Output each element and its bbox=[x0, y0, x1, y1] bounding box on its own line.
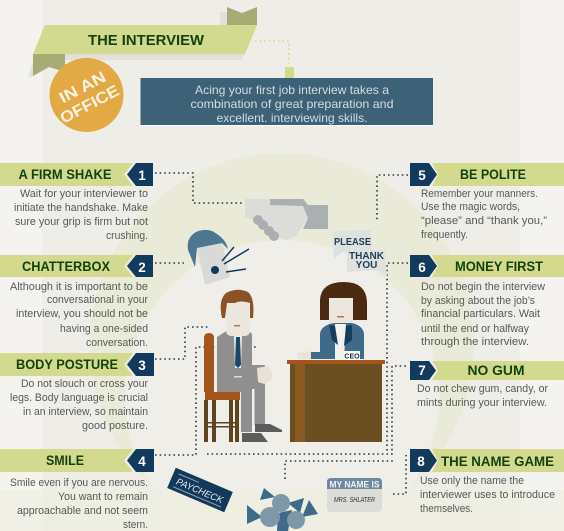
icon: paycheck: PAYCHECK bbox=[174, 477, 225, 506]
panel: 1 a firm shake bbox=[0, 163, 153, 242]
panel: 2 chatterbox: conversational in your bbox=[47, 294, 148, 306]
panel: 6 money first bbox=[410, 255, 564, 348]
panel: 4 smile: approachable and not seem bbox=[17, 505, 148, 517]
title ribbon bbox=[28, 7, 257, 78]
icon: paycheck bbox=[167, 468, 233, 512]
panel: 1 a firm shake: crushing. bbox=[106, 230, 148, 242]
intro connector bbox=[255, 41, 294, 79]
panel: 4 smile: You want to remain bbox=[58, 491, 148, 503]
panel: 6 money first: until the end or halfway bbox=[421, 323, 529, 335]
panel: 3 body posture: BODY POSTURE bbox=[16, 357, 118, 372]
panel: 4 smile: SMILE bbox=[46, 453, 84, 468]
figure: man in suit bbox=[217, 290, 282, 442]
panel: 6 money first: through the interview. bbox=[421, 336, 529, 348]
panel: 5 be polite bbox=[410, 163, 564, 241]
panel: 7 no gum: NO GUM bbox=[468, 363, 524, 378]
panel: 6 money first: by asking about the job’s bbox=[421, 295, 535, 307]
intro text box bbox=[140, 78, 433, 126]
panel: 8 the name game: Use only the name the bbox=[420, 475, 524, 487]
panel: 6 money first: 6 bbox=[418, 260, 426, 275]
speech bubble: please bbox=[333, 230, 372, 259]
panel: 2 chatterbox: Although it is important to be bbox=[10, 281, 148, 293]
panel: 3 body posture: Do not slouch or cross your bbox=[21, 378, 148, 390]
panel: 6 money first: MONEY FIRST bbox=[455, 259, 544, 274]
speech bubble: please: PLEASE bbox=[334, 237, 371, 248]
panel: 4 smile: 4 bbox=[138, 454, 146, 469]
icon: candy bbox=[247, 488, 318, 531]
panel: 5 be polite: “please” and “thank you,” bbox=[421, 215, 547, 227]
panel: 2 chatterbox: 2 bbox=[138, 260, 146, 275]
icon: talking head bbox=[188, 230, 249, 285]
intro text box: combination of great preparation and bbox=[190, 97, 394, 111]
icon: name tag: MRS. SHLATER bbox=[334, 497, 375, 504]
panel: 7 no gum: Do not chew gum, candy, or bbox=[417, 383, 548, 395]
figure: ceo woman bbox=[297, 282, 367, 360]
panel: 1 a firm shake: Wait for your interviewer to bbox=[20, 188, 148, 200]
panel: 4 smile: stern. bbox=[123, 519, 148, 531]
panel: 8 the name game: themselves. bbox=[420, 503, 473, 515]
panel: 1 a firm shake: initiate the handshake. Make bbox=[14, 202, 148, 214]
panel: 8 the name game: 8 bbox=[417, 454, 425, 469]
panel: 5 be polite: 5 bbox=[418, 168, 426, 183]
panel: 3 body posture: in an interview, so maintain bbox=[23, 406, 148, 418]
panel: 6 money first: financial particulars. Wait bbox=[421, 308, 540, 320]
speech bubble: thank you: THANK bbox=[349, 251, 385, 262]
panel: 1 a firm shake: 1 bbox=[138, 168, 146, 183]
panel: 3 body posture: good posture. bbox=[82, 420, 148, 432]
panel: 1 a firm shake: sure your grip is firm but not bbox=[15, 216, 148, 228]
panel: 7 no gum bbox=[410, 361, 564, 409]
panel: 2 chatterbox: having a one-sided bbox=[60, 323, 148, 335]
panel: 4 smile: Smile even if you are nervous. bbox=[10, 477, 148, 489]
desk bbox=[287, 360, 385, 442]
panel: 5 be polite: BE POLITE bbox=[460, 167, 526, 182]
title ribbon: THE INTERVIEW bbox=[88, 32, 205, 49]
badge: in an office bbox=[50, 58, 124, 132]
panel: 8 the name game: THE NAME GAME bbox=[441, 454, 554, 469]
panel: 8 the name game: interviewer uses to introduce bbox=[420, 489, 555, 501]
badge: in an office: OFFICE bbox=[58, 82, 122, 128]
panel: 1 a firm shake: A FIRM SHAKE bbox=[18, 167, 112, 182]
icon: name tag bbox=[327, 478, 382, 512]
panel: 6 money first: Do not begin the interview bbox=[421, 281, 545, 293]
icon: name tag: MY NAME IS bbox=[330, 480, 380, 490]
figure: ceo woman: CEO bbox=[344, 354, 360, 360]
panel: 7 no gum: 7 bbox=[418, 363, 426, 378]
panel: 2 chatterbox: interview, you should not be bbox=[16, 308, 148, 320]
panel: 5 be polite: Use the magic words, bbox=[421, 201, 520, 213]
speech bubble: thank you: YOU bbox=[356, 260, 377, 271]
panel: 3 body posture bbox=[0, 353, 154, 432]
panel: 2 chatterbox: conversation. bbox=[86, 337, 148, 349]
intro text box: excellent. interviewing skills. bbox=[216, 111, 368, 125]
icon: handshake bbox=[245, 199, 328, 241]
panel: 2 chatterbox bbox=[0, 255, 153, 349]
intro text box: Acing your first job interview takes a bbox=[195, 83, 389, 97]
panel: 7 no gum: mints during your interview. bbox=[417, 397, 547, 409]
panel: 3 body posture: legs. Body language is crucial bbox=[10, 392, 148, 404]
panel: 8 the name game bbox=[410, 449, 564, 515]
dotted connectors bbox=[155, 173, 408, 494]
panel: 4 smile bbox=[0, 449, 154, 531]
chair bbox=[204, 333, 240, 442]
panel: 2 chatterbox: CHATTERBOX bbox=[22, 259, 110, 274]
panel: 5 be polite: Remember your manners. bbox=[421, 188, 538, 200]
speech bubble: thank you bbox=[347, 250, 387, 276]
badge: in an office: IN AN bbox=[57, 69, 109, 107]
panel: 5 be polite: frequently. bbox=[421, 229, 468, 241]
panel: 3 body posture: 3 bbox=[138, 358, 146, 373]
